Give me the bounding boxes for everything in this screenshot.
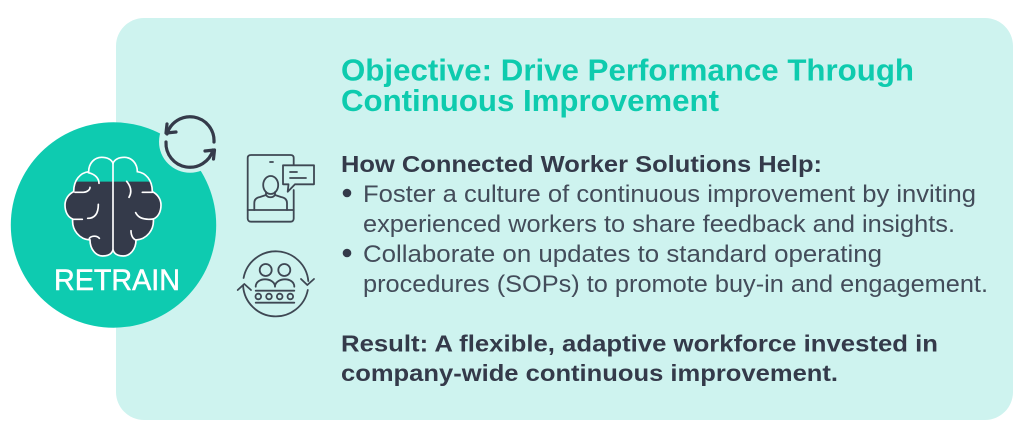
bullet list [343,181,988,298]
title [341,54,914,118]
retrain badge [11,122,216,328]
badge circle [11,122,216,328]
icon: workers on conveyor with cycle arrows [238,251,314,316]
result statement [341,330,938,386]
bullet list: experienced workers to share feedback and insights. [363,211,955,238]
subheading: How Connected Worker Solutions Help: [341,151,822,177]
icon: refresh arrows [159,111,221,173]
bullet list: Foster a culture of continuous improvement by inviting [363,181,976,208]
result statement: Result: A flexible, adaptive workforce invested in [341,330,938,356]
title: Continuous Improvement [341,84,719,118]
result statement: company-wide continuous improvement. [341,360,838,386]
icon: tablet with person and speech bubble [248,155,314,222]
icon: brain [65,157,161,256]
bullet list: Collaborate on updates to standard operating [363,241,882,268]
title: Objective: Drive Performance Through [341,54,914,88]
badge label: RETRAIN [54,264,180,297]
bullet list: procedures (SOPs) to promote buy-in and engagement. [363,271,988,298]
